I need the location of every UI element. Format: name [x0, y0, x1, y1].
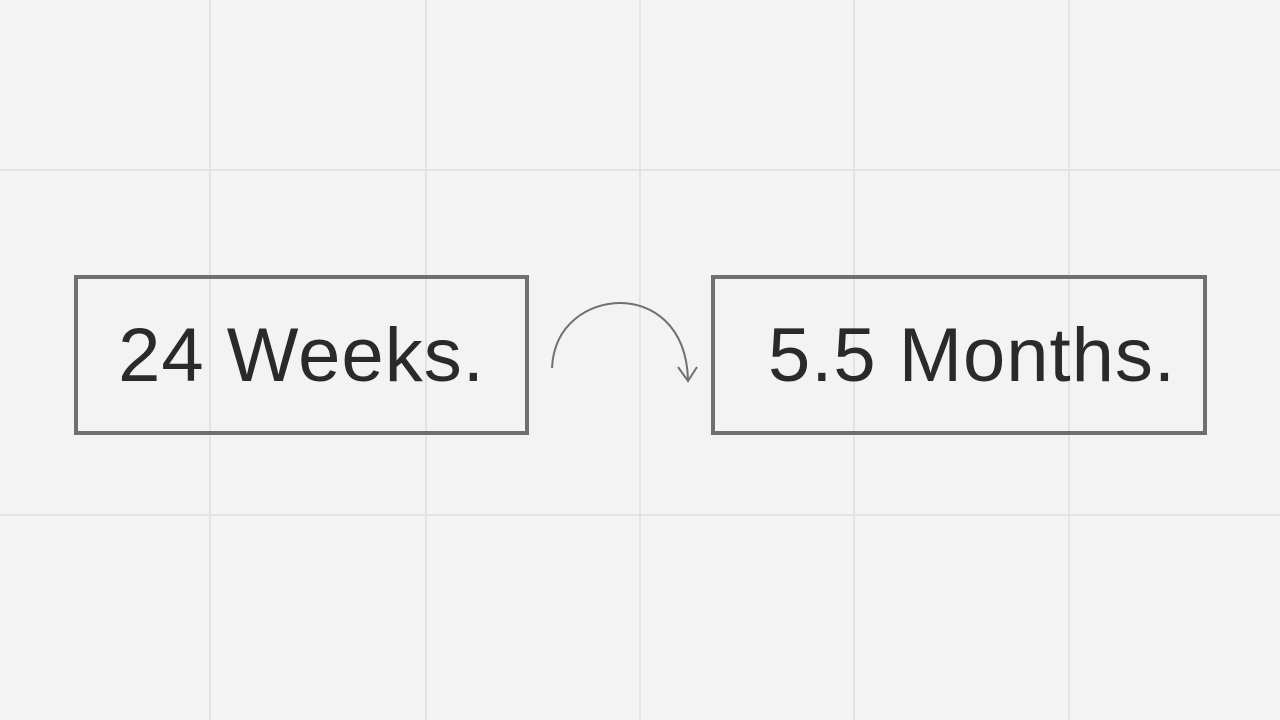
arrow: curved — [551, 302, 698, 383]
box: 24 Weeks — [74, 275, 529, 435]
box: 5.5 Months — [711, 275, 1207, 435]
box: 5.5 Months: 5.5 Months. — [768, 312, 1176, 398]
box: 24 Weeks: 24 Weeks. — [118, 312, 485, 398]
